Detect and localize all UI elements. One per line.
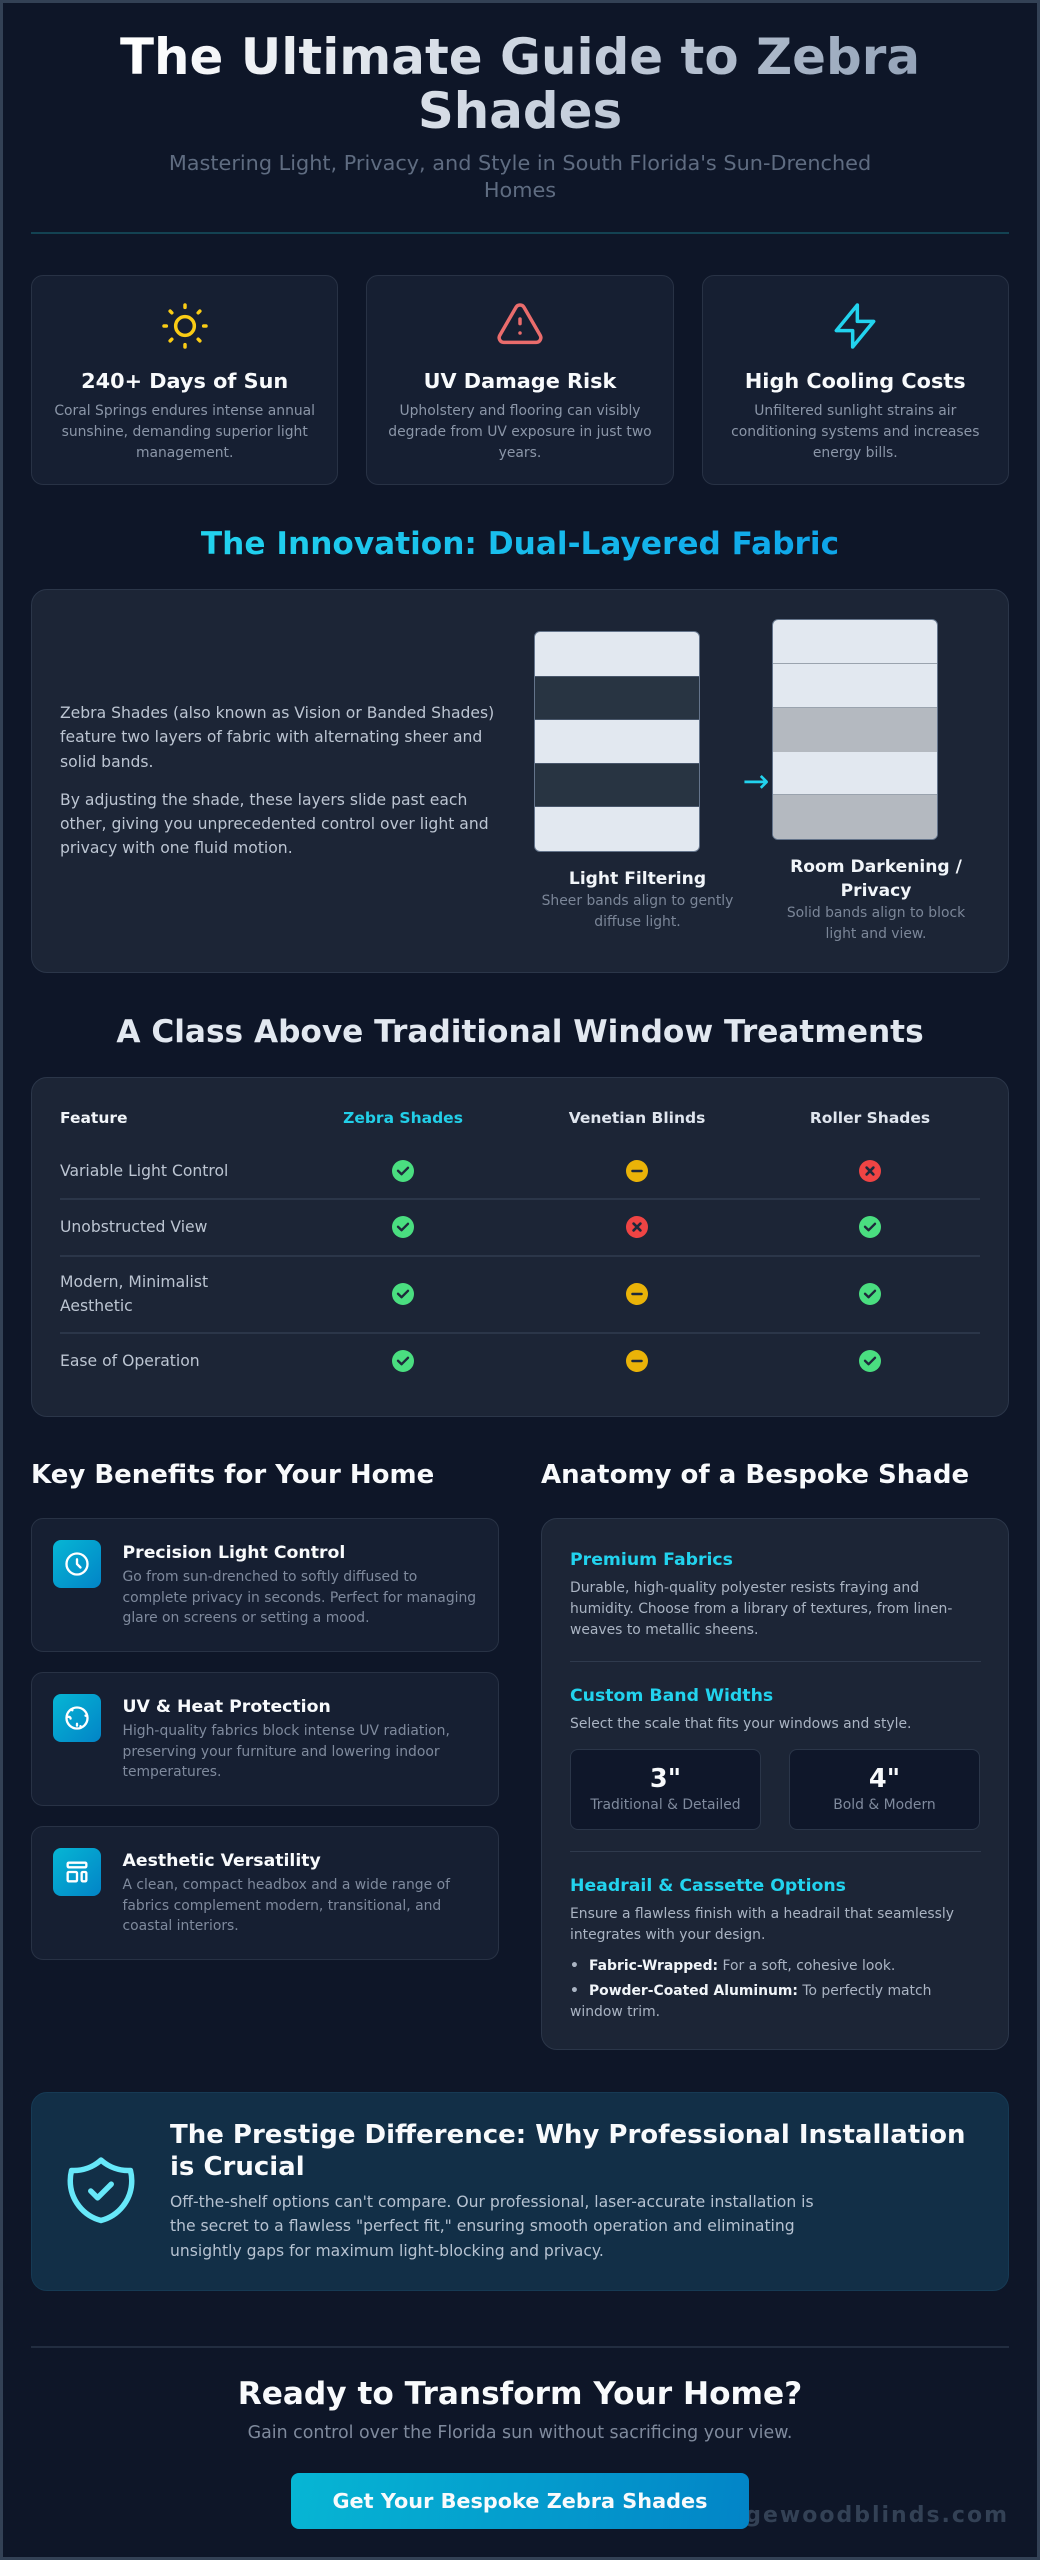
band widths heading: Custom Band Widths	[570, 1686, 773, 1706]
prestige text: Off-the-shelf options can't compare. Our professional, laser-accurate installation is	[170, 2193, 814, 2211]
caption: light filtering: Sheer bands align to gently	[542, 893, 733, 909]
band widths text: Select the scale that fits your windows and style.	[570, 1716, 911, 1732]
headrail text	[570, 1906, 954, 1943]
prestige heading	[170, 2120, 966, 2182]
card heading: UV Damage Risk	[424, 369, 616, 393]
prestige heading: The Prestige Difference: Why Professional Installation	[170, 2120, 966, 2150]
benefit heading: UV & Heat Protection	[122, 1697, 331, 1717]
icon: shield check	[68, 2157, 134, 2224]
card text: conditioning systems and increases	[731, 424, 979, 440]
explanation text: feature two layers of fabric with alternating sheer and	[60, 728, 482, 746]
headrail text: integrates with your design.	[570, 1927, 765, 1943]
benefit text: temperatures.	[122, 1764, 221, 1780]
icon: sun	[162, 303, 208, 349]
benefit text: complete privacy in seconds. Perfect for managing	[122, 1590, 476, 1606]
card text: management.	[136, 445, 233, 461]
prestige heading: is Crucial	[170, 2152, 305, 2182]
card text	[54, 403, 315, 461]
benefit text	[122, 1569, 476, 1626]
table header: Zebra Shades	[343, 1109, 463, 1127]
caption: light filtering	[542, 869, 733, 930]
table header: Feature	[60, 1109, 128, 1127]
card text	[388, 403, 652, 461]
benefit text	[122, 1723, 450, 1780]
subtitle: Mastering Light, Privacy, and Style in South Florida's Sun-Drenched	[169, 151, 871, 175]
benefit text: A clean, compact headbox and a wide range of	[122, 1877, 450, 1893]
option: 3 inch: 3"	[650, 1764, 681, 1794]
header divider	[31, 232, 1009, 234]
card text	[731, 403, 979, 461]
icon: clock	[53, 1540, 101, 1588]
explanation text: solid bands. By adjusting the shade, these layers slide past each	[60, 753, 467, 809]
headrail text: Ensure a flawless finish with a headrail that seamlessly	[570, 1906, 954, 1922]
headrail options list	[570, 1958, 931, 2020]
footer divider	[31, 2346, 1009, 2348]
premium fabrics text: Durable, high-quality polyester resists fraying and	[570, 1580, 919, 1596]
arrow: →	[742, 762, 769, 800]
benefit heading: Precision Light Control	[122, 1543, 345, 1563]
row labels: Ease of Operation	[60, 1352, 200, 1370]
row labels	[60, 1162, 228, 1370]
panel: 240+ days of sun	[31, 275, 338, 485]
table header: Venetian Blinds	[569, 1109, 705, 1127]
prestige text	[170, 2193, 814, 2260]
button: Get Your Bespoke Zebra Shades	[332, 2489, 708, 2513]
card text: Coral Springs endures intense annual	[54, 403, 315, 419]
heading: key benefits: Key Benefits for Your Home	[31, 1460, 434, 1490]
row labels: Modern, Minimalist	[60, 1273, 208, 1291]
watermark: prestigewoodblinds.com	[661, 2503, 1009, 2528]
card text: sunshine, demanding superior light	[62, 424, 308, 440]
row labels: Variable Light Control	[60, 1162, 228, 1180]
caption: room darkening: Solid bands align to block	[787, 905, 965, 921]
benefit text: High-quality fabrics block intense UV radiation,	[122, 1723, 450, 1739]
option: 4 inch: 4"	[869, 1764, 900, 1794]
benefit text: fabrics complement modern, transitional, and	[122, 1898, 441, 1914]
benefit text: glare on screens or setting a mood.	[122, 1610, 370, 1626]
panel: UV damage risk	[366, 275, 674, 485]
headrail options list: •	[570, 1958, 579, 1974]
title: The Ultimate Guide to Zebra	[120, 28, 920, 86]
caption: room darkening: Room Darkening /	[790, 857, 962, 877]
panel: precision light control	[31, 1518, 499, 1652]
heading: anatomy: Anatomy of a Bespoke Shade	[541, 1460, 969, 1490]
prestige text: the secret to a flawless "perfect fit," ensuring smooth operation and eliminating	[170, 2217, 795, 2235]
explanation text: other, giving you unprecedented control over light and	[60, 815, 489, 833]
icon: lightning bolt	[834, 303, 876, 349]
subtitle: Homes	[484, 178, 556, 202]
call to action text: Gain control over the Florida sun without sacrificing your view.	[248, 2423, 792, 2443]
button	[291, 2473, 749, 2529]
heading: the innovation: The Innovation: Dual-Layered Fabric	[201, 526, 839, 562]
panel: UV and heat protection	[31, 1672, 499, 1806]
explanation text: privacy with one fluid motion.	[60, 839, 293, 857]
card heading: 240+ Days of Sun	[81, 369, 288, 393]
option: 3 inch: Traditional & Detailed	[590, 1797, 741, 1813]
explanation text	[60, 704, 494, 857]
card heading: High Cooling Costs	[745, 369, 966, 393]
benefit text: coastal interiors.	[122, 1918, 239, 1934]
card text: years.	[499, 445, 541, 461]
card text: degrade from UV exposure in just two	[388, 424, 652, 440]
title: Shades	[418, 82, 622, 140]
diagram: light filtering shade	[534, 631, 700, 852]
caption: light filtering: Light Filtering	[569, 869, 706, 889]
icon: globe	[53, 1694, 101, 1742]
panel: dual-layered fabric	[31, 589, 1009, 973]
option: 3 inch	[570, 1749, 761, 1830]
table header	[60, 1109, 930, 1127]
caption: room darkening	[787, 857, 965, 942]
subtitle	[169, 151, 871, 202]
panel: comparison table	[31, 1077, 1009, 1417]
panel: high cooling costs	[702, 275, 1009, 485]
anatomy dividers	[570, 1661, 981, 1662]
icon: warning triangle	[497, 303, 543, 344]
premium fabrics text: weaves to metallic sheens.	[570, 1622, 758, 1638]
premium fabrics text	[570, 1580, 952, 1638]
caption: light filtering: diffuse light.	[594, 914, 681, 930]
row labels: Unobstructed View	[60, 1218, 207, 1236]
prestige text: unsightly gaps for maximum light-blocking and privacy.	[170, 2242, 604, 2260]
panel: the prestige difference	[31, 2092, 1009, 2291]
headrail options list: window trim.	[570, 2004, 660, 2020]
panel: aesthetic versatility	[31, 1826, 499, 1960]
explanation text: Zebra Shades (also known as Vision or Banded Shades)	[60, 704, 494, 722]
diagram: room darkening shade	[772, 619, 938, 840]
premium fabrics heading: Premium Fabrics	[570, 1550, 733, 1570]
call to action heading: Ready to Transform Your Home?	[238, 2376, 802, 2412]
icon: layout template	[53, 1848, 101, 1896]
headrail heading: Headrail & Cassette Options	[570, 1876, 846, 1896]
panel: anatomy of a bespoke shade	[541, 1518, 1009, 2050]
benefit text	[122, 1877, 450, 1934]
caption: room darkening: light and view.	[826, 926, 926, 942]
card text: Unfiltered sunlight strains air	[754, 403, 956, 419]
title	[31, 31, 1009, 138]
benefit heading: Aesthetic Versatility	[122, 1851, 321, 1871]
card text: Upholstery and flooring can visibly	[399, 403, 641, 419]
benefit text: Go from sun-drenched to softly diffused to	[122, 1569, 417, 1585]
premium fabrics text: humidity. Choose from a library of textures, from linen-	[570, 1601, 952, 1617]
headrail options list: •	[570, 1983, 579, 1999]
card text: energy bills.	[813, 445, 898, 461]
benefit text: preserving your furniture and lowering indoor	[122, 1744, 440, 1760]
caption: room darkening: Privacy	[841, 881, 911, 901]
table dividers	[60, 1198, 980, 1200]
row labels: Aesthetic	[60, 1297, 133, 1315]
headrail options list: Fabric-Wrapped: For a soft, cohesive look. Powder-Coated Aluminum: To perfectly match	[589, 1958, 931, 1999]
option: 4 inch	[789, 1749, 980, 1830]
table header: Roller Shades	[810, 1109, 930, 1127]
heading: comparison: A Class Above Traditional Window Treatments	[116, 1014, 924, 1050]
option: 4 inch: Bold & Modern	[833, 1797, 936, 1813]
